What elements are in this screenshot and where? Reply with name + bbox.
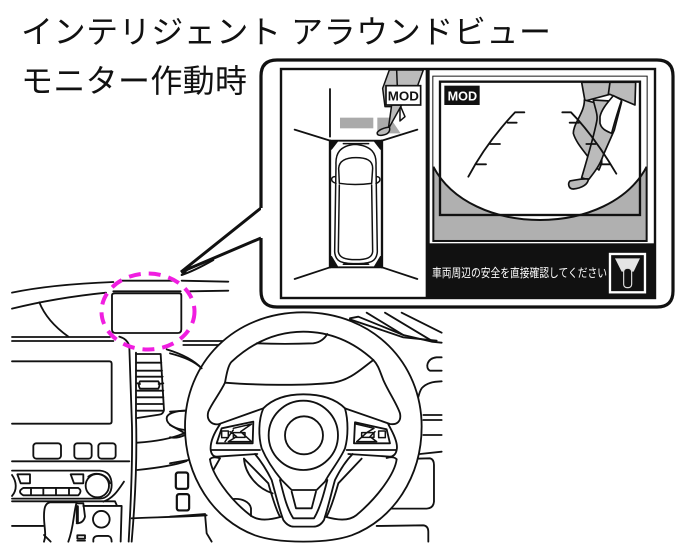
- wheel rim: [185, 312, 422, 542]
- dashboard line drawing: right side: [350, 313, 442, 542]
- hub: [259, 394, 347, 490]
- legs: [569, 82, 636, 189]
- right guide lines: [562, 112, 616, 174]
- car from above: [330, 141, 382, 267]
- title: [21, 14, 551, 99]
- MOD badge: [444, 86, 480, 105]
- callout panel: [261, 60, 673, 307]
- gray markers: [340, 118, 373, 128]
- MOD label: MOD: [388, 88, 419, 103]
- black message bar: [428, 243, 655, 299]
- steering wheel: [185, 312, 422, 542]
- lower rim interior: [210, 459, 282, 520]
- panel: top-down view: [295, 70, 423, 279]
- title: インテリジェント アラウンドビュー: [21, 14, 551, 50]
- warning message: 車両周辺の安全を直接確認してください: [432, 265, 607, 280]
- upper spoke and rim interior: [208, 332, 400, 424]
- lower spoke: [255, 454, 353, 527]
- dashboard line drawing: left side: [12, 260, 228, 542]
- title: モニター作動時: [21, 63, 247, 99]
- camera frame: [433, 77, 647, 241]
- monitor frame: [281, 69, 655, 298]
- MOD label: [386, 86, 421, 105]
- right switch pad: [348, 424, 397, 457]
- left of wheel overlays: [170, 353, 212, 542]
- parking guide lines: [295, 89, 417, 279]
- black divider: [426, 69, 430, 298]
- legs with gray fill: [377, 70, 423, 135]
- left switch pad: [211, 424, 257, 457]
- left guide lines: [468, 112, 524, 177]
- highlight dashed ellipse around display: [102, 274, 194, 350]
- icon: car camera view: [610, 254, 645, 292]
- white camera area: [433, 77, 647, 220]
- MOD badge: MOD: [448, 89, 477, 103]
- callout pointer and panel: [181, 208, 261, 272]
- panel: rear camera view: [426, 69, 655, 299]
